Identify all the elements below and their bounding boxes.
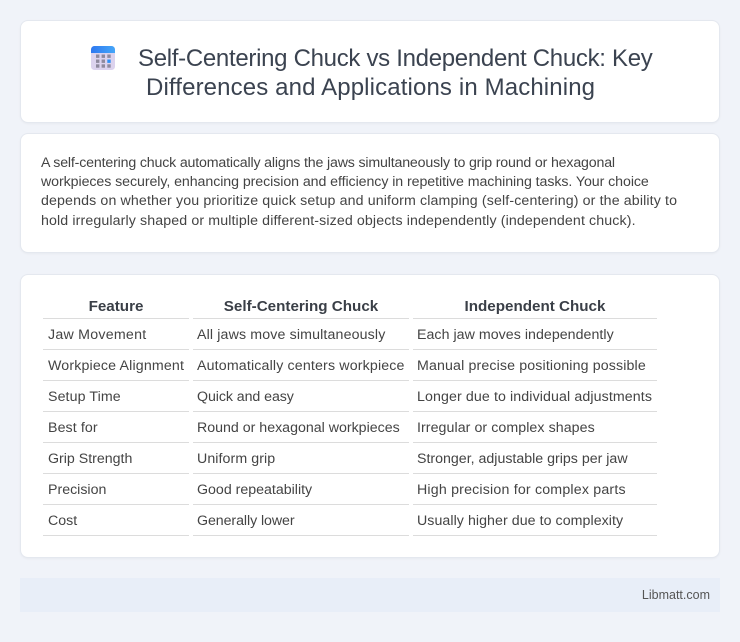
comparison table: Quick and easy bbox=[197, 389, 294, 405]
panel: title card bbox=[20, 20, 720, 123]
comparison table: Cost bbox=[48, 513, 77, 529]
comparison table: Longer due to individual adjustments bbox=[417, 389, 652, 405]
comparison table bbox=[43, 298, 657, 536]
intro text: A self-centering chuck automatically aligns the jaws simultaneously to grip round or hexagonal bbox=[41, 155, 615, 171]
comparison table: Automatically centers workpiece bbox=[197, 358, 405, 374]
comparison table: Precision bbox=[48, 482, 106, 498]
footer bar bbox=[20, 578, 720, 612]
comparison table: Stronger, adjustable grips per jaw bbox=[417, 451, 628, 467]
comparison table: Grip Strength bbox=[48, 451, 132, 467]
comparison table: Workpiece Alignment bbox=[48, 358, 184, 374]
comparison table: Good repeatability bbox=[197, 482, 312, 498]
comparison table: Independent Chuck bbox=[465, 298, 605, 315]
title: Differences and Applications in Machining bbox=[146, 74, 595, 101]
panel: introduction card bbox=[20, 133, 720, 253]
comparison table: Irregular or complex shapes bbox=[417, 420, 595, 436]
comparison table: Feature bbox=[89, 298, 143, 315]
footer source text: Libmatt.com bbox=[642, 588, 710, 602]
comparison table: Generally lower bbox=[197, 513, 295, 529]
intro text: depends on whether you prioritize quick setup and uniform clamping (self-centering) or the ability to bbox=[41, 193, 677, 209]
intro text: hold irregularly shaped or multiple different-sized objects independently (independent chuck). bbox=[41, 213, 636, 229]
panel: comparison table card bbox=[20, 274, 720, 558]
title bbox=[138, 45, 653, 101]
comparison table: Jaw Movement bbox=[48, 327, 146, 343]
intro text: workpieces securely, enhancing precision and efficiency in repetitive machining tasks. Your choice bbox=[41, 174, 649, 190]
comparison table: Uniform grip bbox=[197, 451, 275, 467]
comparison table: Best for bbox=[48, 420, 98, 436]
comparison table: Round or hexagonal workpieces bbox=[197, 420, 400, 436]
comparison table: High precision for complex parts bbox=[417, 482, 626, 498]
comparison table: Setup Time bbox=[48, 389, 121, 405]
intro text bbox=[41, 155, 677, 229]
title: Self-Centering Chuck vs Independent Chuck: Key bbox=[138, 45, 652, 72]
comparison table: Each jaw moves independently bbox=[417, 327, 614, 343]
comparison table: All jaws move simultaneously bbox=[197, 327, 385, 343]
comparison table: Usually higher due to complexity bbox=[417, 513, 623, 529]
icon: calendar grid bbox=[91, 46, 115, 70]
comparison table: Manual precise positioning possible bbox=[417, 358, 646, 374]
comparison table: Self-Centering Chuck bbox=[224, 298, 378, 315]
